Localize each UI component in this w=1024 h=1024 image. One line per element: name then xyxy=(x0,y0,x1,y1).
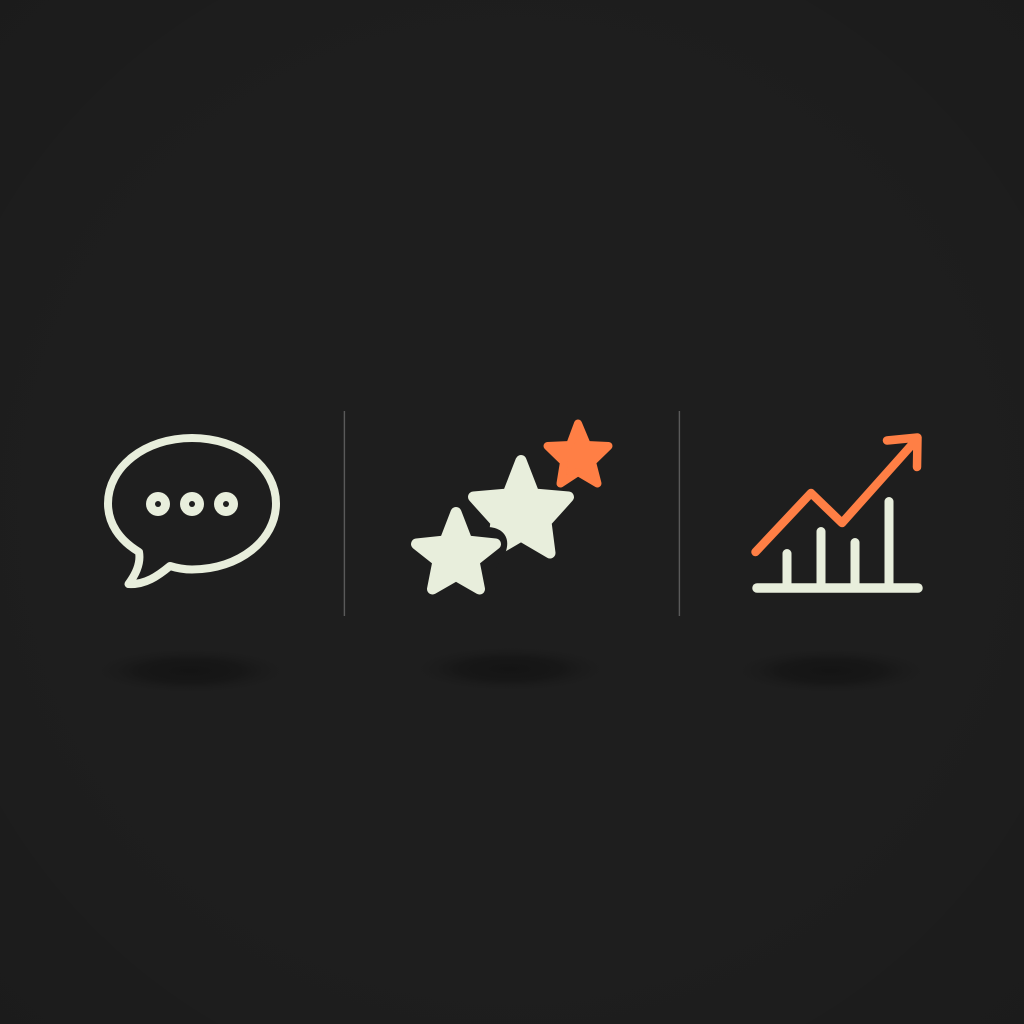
icon: growth chart xyxy=(756,438,918,588)
icon: speech bubble xyxy=(108,438,276,584)
bubble outline xyxy=(108,438,276,584)
trend arrow xyxy=(756,438,918,552)
ground shadow: middle icon xyxy=(406,645,614,693)
small cream star xyxy=(416,512,496,589)
dot centres xyxy=(155,501,229,507)
typing dots xyxy=(146,492,238,516)
divider: right xyxy=(679,411,680,616)
large cream star xyxy=(474,460,568,553)
ground shadow: left icon xyxy=(86,647,294,695)
notch cut from large star xyxy=(466,527,507,568)
divider: left xyxy=(344,411,345,616)
orange star xyxy=(548,424,608,484)
ground shadow: right icon xyxy=(727,647,935,695)
bars and baseline xyxy=(757,502,918,588)
icon: three rising stars xyxy=(416,424,608,589)
